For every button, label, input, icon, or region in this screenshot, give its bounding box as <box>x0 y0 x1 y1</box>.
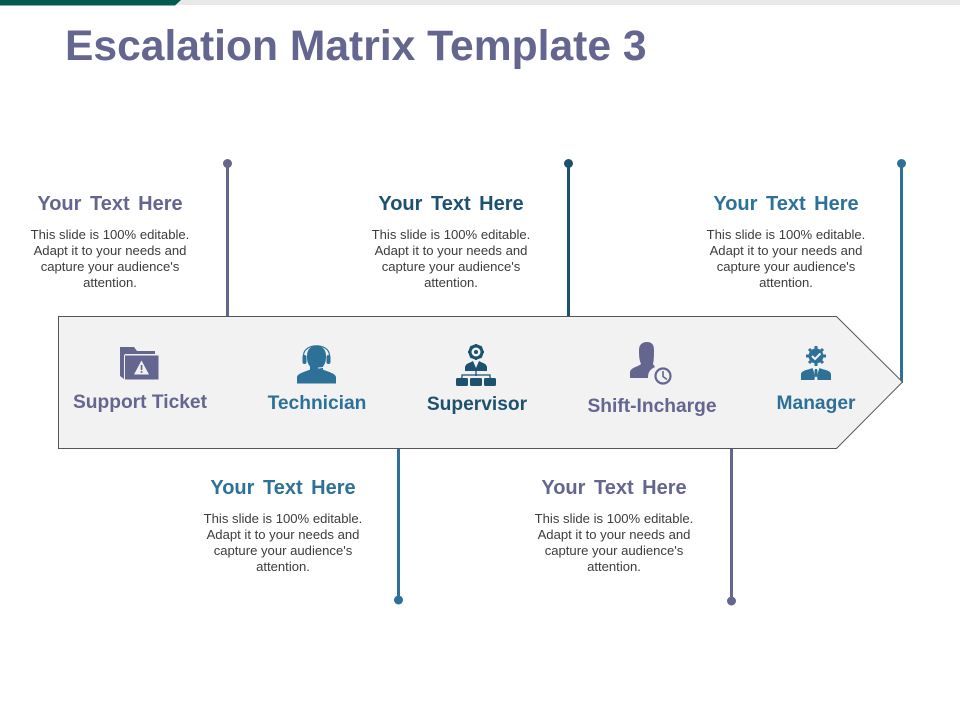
body: This slide is 100% editable. <box>204 511 362 526</box>
body: Adapt it to your needs and <box>207 527 359 542</box>
body: attention. <box>424 275 478 290</box>
line: bottom 1 <box>394 448 403 604</box>
body: capture your audience's <box>382 259 520 274</box>
heading: Your Text Here <box>210 477 356 499</box>
body: capture your audience's <box>214 543 352 558</box>
body <box>534 511 693 574</box>
label: Supervisor: Supervisor <box>427 394 527 415</box>
line: top 2 <box>564 159 573 317</box>
body <box>706 227 865 290</box>
text block: top 3 <box>706 193 865 290</box>
body: capture your audience's <box>545 543 683 558</box>
heading: Your Text Here <box>378 193 524 215</box>
line: top 3 <box>897 159 906 383</box>
label: Technician: Technician <box>268 393 366 414</box>
body: This slide is 100% editable. <box>535 511 693 526</box>
icon: shift person with clock <box>630 342 672 385</box>
body: Adapt it to your needs and <box>710 243 862 258</box>
body: attention. <box>83 275 137 290</box>
body: capture your audience's <box>717 259 855 274</box>
body <box>204 511 362 574</box>
body: This slide is 100% editable. <box>31 227 189 242</box>
text block: bottom 2 <box>534 477 693 574</box>
body: capture your audience's <box>41 259 179 274</box>
body: This slide is 100% editable. <box>372 227 530 242</box>
line: bottom 2 <box>727 448 736 606</box>
icon: supervisor with org chart <box>456 344 496 386</box>
arrow banner <box>58 316 902 448</box>
body: Adapt it to your needs and <box>538 527 690 542</box>
body: attention. <box>587 559 641 574</box>
icon: technician headset <box>297 345 336 384</box>
body <box>30 227 189 290</box>
title: Escalation Matrix Template 3 <box>65 22 647 70</box>
heading: Your Text Here <box>713 193 859 215</box>
body: attention. <box>759 275 813 290</box>
body: This slide is 100% editable. <box>707 227 865 242</box>
body: Adapt it to your needs and <box>34 243 186 258</box>
label: Support Ticket: Support Ticket <box>73 392 207 413</box>
top accent bar <box>0 0 960 6</box>
text block: bottom 1 <box>204 477 362 574</box>
heading: Your Text Here <box>37 193 183 215</box>
text block: top 1 <box>30 193 189 290</box>
icon: folder with warning <box>120 347 158 380</box>
body: Adapt it to your needs and <box>375 243 527 258</box>
label: Shift-Incharge: Shift-Incharge <box>588 396 716 417</box>
heading: Your Text Here <box>541 477 687 499</box>
body: attention. <box>256 559 310 574</box>
line: top 1 <box>223 159 232 317</box>
text block: top 2 <box>372 193 530 290</box>
icon: manager with gear check <box>801 346 831 380</box>
body <box>372 227 530 290</box>
label: Manager: Manager <box>777 393 855 414</box>
